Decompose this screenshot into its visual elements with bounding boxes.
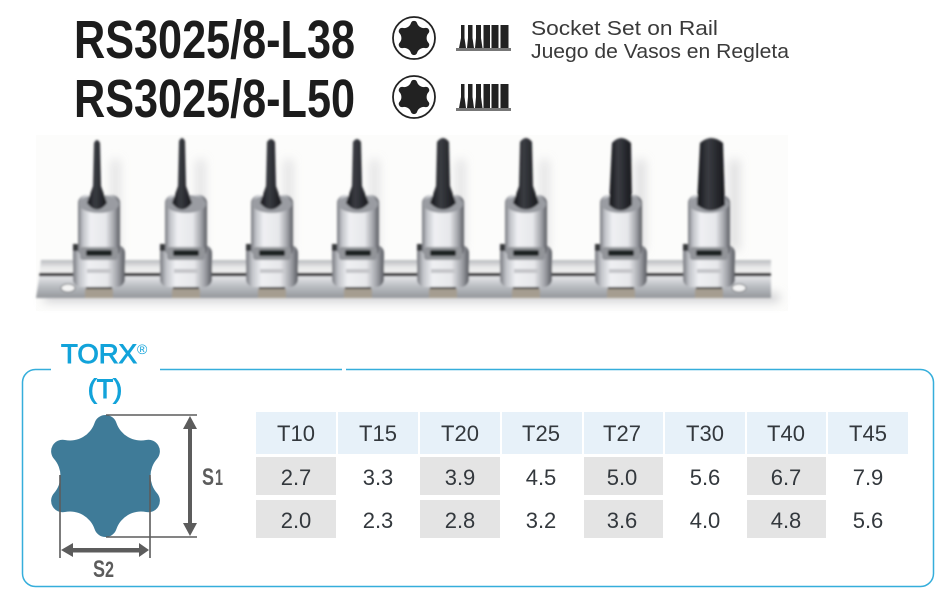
heading: TORX (T) bbox=[61, 339, 148, 404]
table row: S2 values: 5.6 bbox=[853, 508, 883, 533]
panel: torx specification bbox=[22, 339, 934, 586]
table header row: T30 bbox=[686, 421, 724, 446]
table header row: T25 bbox=[522, 421, 560, 446]
table row: S1 values: 3.3 bbox=[363, 465, 393, 490]
description text bbox=[531, 17, 790, 63]
table row: S2 values: 4.0 bbox=[690, 508, 720, 533]
table row: S2 values: 3.2 bbox=[526, 508, 556, 533]
table row: S2 values: 2.3 bbox=[363, 508, 393, 533]
icon: socket rail, first row bbox=[456, 25, 511, 51]
table: torx sizes bbox=[256, 412, 908, 538]
table row: S2 values bbox=[256, 500, 883, 538]
heading: TORX (T): ® bbox=[137, 341, 148, 357]
description text: Socket Set on Rail bbox=[531, 17, 718, 40]
table header row: T27 bbox=[603, 421, 641, 446]
title: RS3025/8-L50: RS3025/8-L50 bbox=[74, 69, 355, 129]
heading: TORX (T): (T) bbox=[88, 374, 122, 404]
diagram: torx profile with S1 and S2 dimensions: 1 bbox=[215, 465, 223, 490]
table row: S2 values: 2.0 bbox=[281, 508, 311, 533]
diagram: torx profile with S1 and S2 dimensions: S bbox=[202, 464, 214, 491]
table header row bbox=[256, 412, 908, 454]
table row: S1 values bbox=[256, 457, 883, 495]
table header row: T45 bbox=[849, 421, 887, 446]
table header row: T10 bbox=[277, 421, 315, 446]
icon: torx drive symbol, second row bbox=[393, 76, 435, 118]
table row: S1 values: 5.6 bbox=[690, 465, 720, 490]
table row: S1 values: 7.9 bbox=[853, 465, 883, 490]
photo: socket set on rail bbox=[36, 135, 788, 311]
table row: S2 values: 3.6 bbox=[607, 508, 637, 533]
diagram: torx profile with S1 and S2 dimensions: 2 bbox=[105, 557, 114, 582]
heading: TORX (T): TORX bbox=[61, 339, 137, 369]
table header row: T40 bbox=[767, 421, 805, 446]
table row: S1 values: 3.9 bbox=[445, 465, 475, 490]
diagram: torx profile with S1 and S2 dimensions bbox=[51, 415, 223, 583]
table row: S1 values: 2.7 bbox=[281, 465, 311, 490]
table header row: T20 bbox=[441, 421, 479, 446]
table row: S2 values: 2.8 bbox=[445, 508, 475, 533]
table row: S2 values: 4.8 bbox=[771, 508, 801, 533]
table row: S1 values: 5.0 bbox=[607, 465, 637, 490]
icon: torx drive symbol, first row bbox=[393, 17, 435, 59]
table header row: T15 bbox=[359, 421, 397, 446]
description text: Juego de Vasos en Regleta bbox=[531, 40, 790, 63]
table row: S1 values: 6.7 bbox=[771, 465, 801, 490]
diagram: torx profile with S1 and S2 dimensions: S bbox=[93, 556, 105, 583]
icon: socket rail, second row bbox=[456, 84, 511, 111]
table row: S1 values: 4.5 bbox=[526, 465, 556, 490]
title: RS3025/8-L38: RS3025/8-L38 bbox=[74, 10, 355, 70]
